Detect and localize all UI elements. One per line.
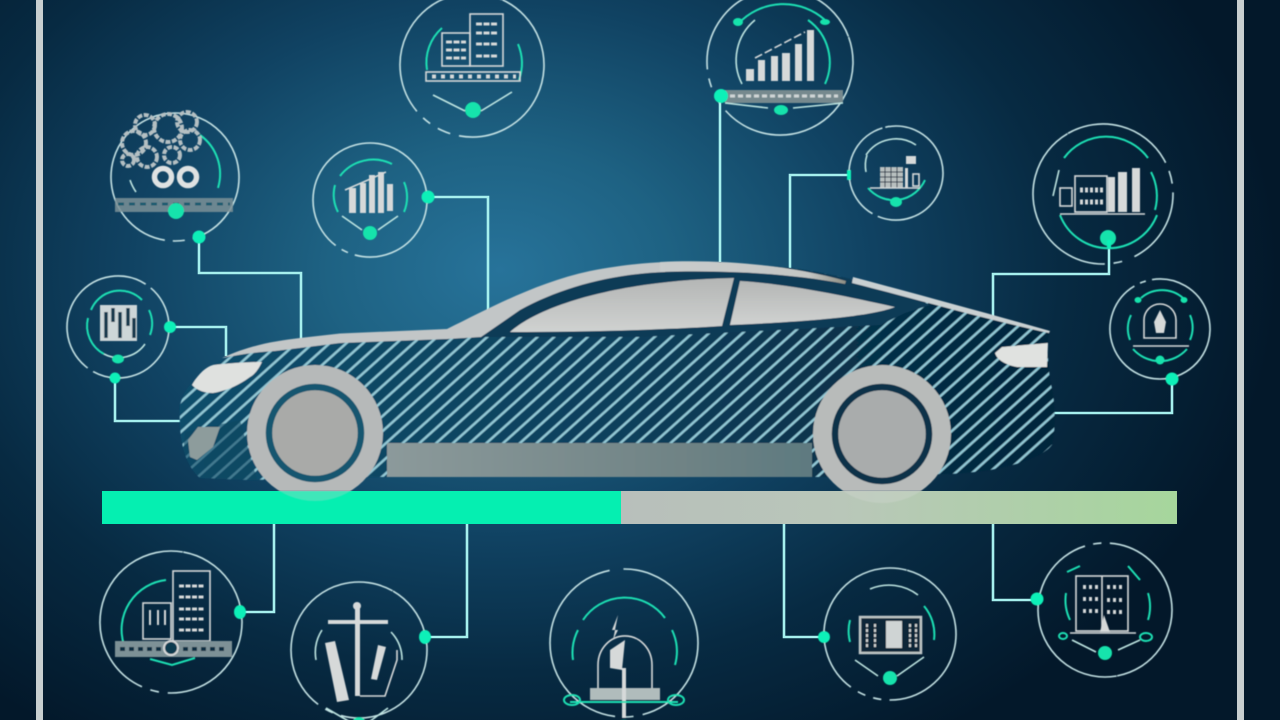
icon: apartment block xyxy=(1070,576,1136,633)
panel: column chart xyxy=(292,122,448,278)
icon: dome monument xyxy=(1133,304,1189,346)
icon: T-frame and slabs xyxy=(325,602,397,702)
panel: industrial plant xyxy=(1007,98,1199,290)
panel: left dashboard xyxy=(46,255,190,399)
front wheel xyxy=(247,365,383,501)
icon: honeycomb cloud xyxy=(122,112,200,167)
panel: bottom T-frame xyxy=(266,557,452,720)
icon: lightning dome xyxy=(564,615,684,718)
icon: buildings on conveyor xyxy=(426,14,520,81)
icon: small factory xyxy=(870,156,920,188)
connector node xyxy=(422,190,434,204)
connector node xyxy=(714,89,728,103)
icon: rising bar chart xyxy=(746,30,814,81)
front window xyxy=(510,278,734,332)
panel: bottom control board xyxy=(809,553,971,715)
connector node xyxy=(234,605,246,619)
front headlight xyxy=(192,362,262,393)
rear wheel xyxy=(813,365,951,503)
panel: conveyor buildings xyxy=(376,0,568,161)
connector stem xyxy=(1107,240,1111,248)
right frame bar xyxy=(1237,0,1244,720)
connector node xyxy=(192,230,206,244)
car body with hatching xyxy=(179,266,1056,480)
rear deck line xyxy=(852,277,1050,333)
connector node top xyxy=(164,321,176,333)
panel: bottom dome xyxy=(550,569,698,720)
decorative data band xyxy=(725,90,843,103)
icon: control board xyxy=(860,617,921,653)
panel: cloud and rings xyxy=(106,108,244,246)
icon: column chart xyxy=(345,172,393,213)
front fog lamp xyxy=(188,427,220,460)
progress bar xyxy=(102,491,1177,524)
hood and windshield band xyxy=(222,262,665,358)
panel: bottom-left tower xyxy=(89,540,253,704)
panel: right dome xyxy=(1096,265,1224,393)
connector node xyxy=(1030,592,1044,606)
rear window xyxy=(730,281,895,325)
connector node xyxy=(847,170,851,180)
icon: industrial plant xyxy=(1060,168,1145,214)
connector node xyxy=(419,630,431,644)
connector node bottom xyxy=(110,372,120,384)
left frame bar xyxy=(36,0,43,720)
panel: analytics chart xyxy=(686,0,874,156)
icon: pair of rings xyxy=(154,168,196,186)
icon: tower with wheel xyxy=(115,571,232,657)
connector node xyxy=(818,631,830,643)
connector node xyxy=(1166,372,1178,386)
lower sill xyxy=(387,443,812,477)
panel: small factory xyxy=(832,109,960,237)
decorative road band xyxy=(115,198,233,212)
roof band xyxy=(660,261,846,284)
panel: bottom-right apartment xyxy=(1027,532,1183,688)
car xyxy=(170,255,1070,503)
connector lines xyxy=(115,96,1172,637)
icon: dashboard panel xyxy=(100,305,137,341)
rear light xyxy=(995,343,1048,367)
